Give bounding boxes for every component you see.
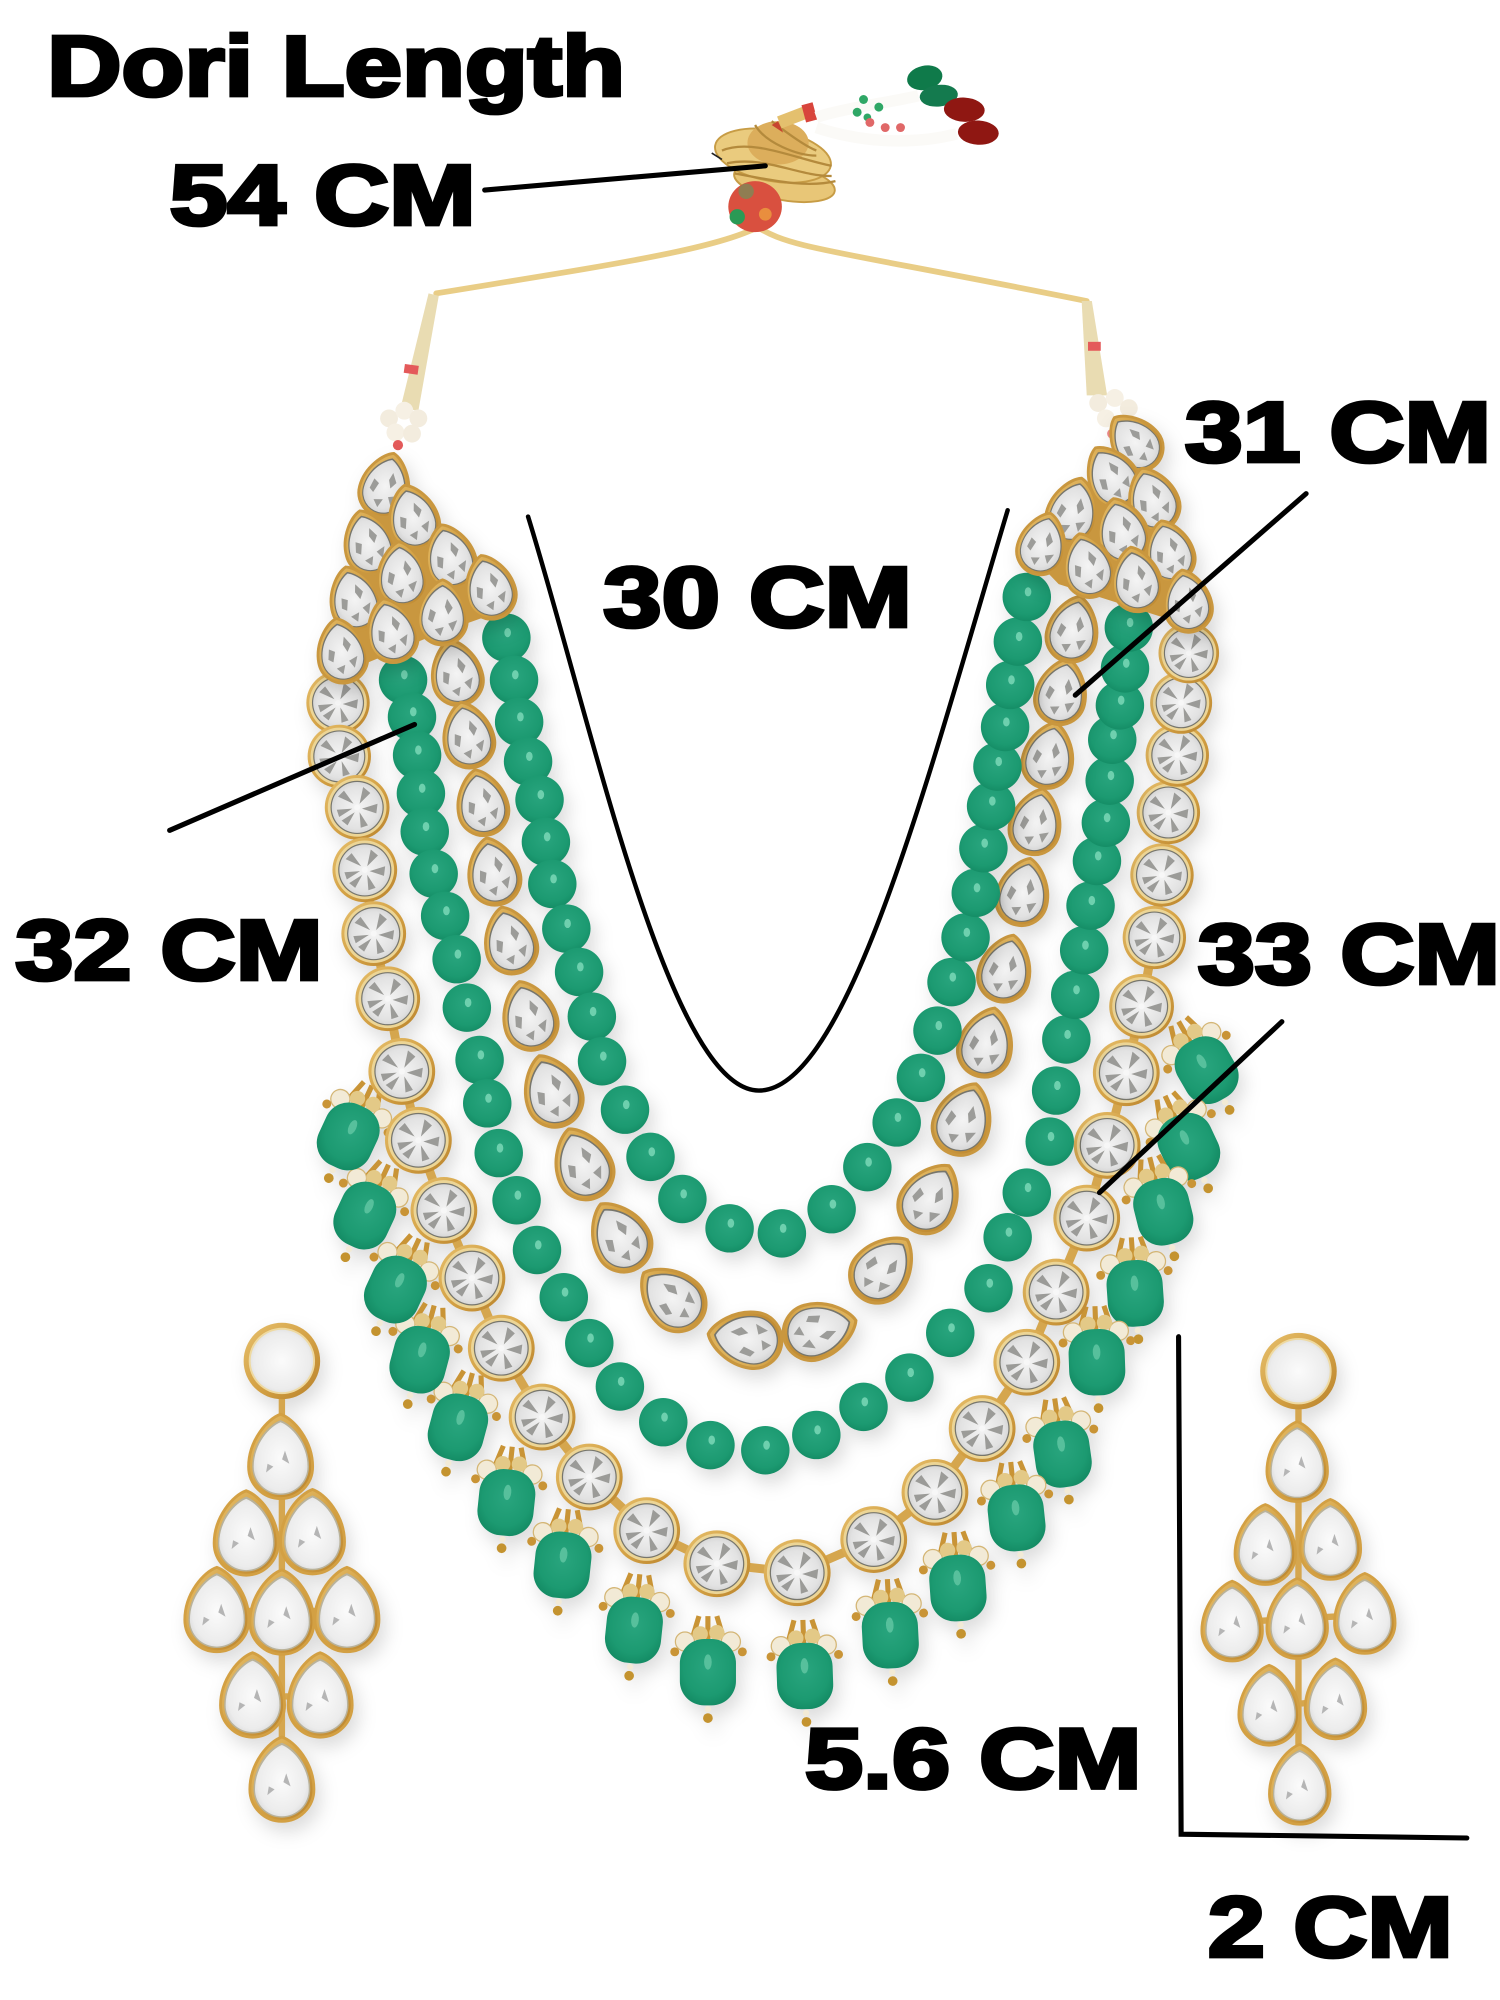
necklace cord bbox=[436, 227, 1087, 301]
arrow: 30 cm inner curve bbox=[528, 510, 1008, 1091]
label: 33 cm: 33 CM bbox=[1198, 907, 1500, 1002]
arrow: 33 cm pointer bbox=[1099, 1022, 1282, 1193]
left top stone cluster bbox=[312, 447, 522, 687]
right top stone cluster bbox=[1011, 402, 1216, 636]
left tassel end bbox=[380, 293, 439, 450]
clasp beads bbox=[816, 62, 999, 146]
label: 32 cm: 32 CM bbox=[15, 904, 323, 999]
middle kundan drop strand bbox=[425, 591, 1105, 1372]
label: 2 cm: 2 CM bbox=[1208, 1881, 1453, 1976]
arrow: 32 cm pointer bbox=[170, 724, 415, 830]
right tassel end bbox=[1082, 301, 1138, 439]
arrow: earring height bracket bbox=[1179, 1337, 1467, 1838]
label: 30 cm: 30 CM bbox=[603, 550, 912, 645]
title: dori length: Dori Length bbox=[47, 20, 625, 115]
outer green bead strand bbox=[379, 603, 1153, 1474]
label: 5.6 cm: 5.6 CM bbox=[805, 1712, 1142, 1807]
dori knot bbox=[711, 102, 838, 232]
label: 54 cm: 54 CM bbox=[170, 148, 476, 243]
arrow: dori length pointer bbox=[485, 166, 765, 190]
outer kundan strand with pendants bbox=[293, 623, 1266, 1728]
arrow: 31 cm pointer bbox=[1075, 494, 1306, 695]
left earring bbox=[185, 1323, 379, 1821]
label: 31 cm: 31 CM bbox=[1185, 386, 1491, 481]
hanging green pendants bbox=[293, 1002, 1266, 1728]
inner green bead strand bbox=[482, 573, 1051, 1258]
measurement lines bbox=[170, 166, 1467, 1838]
right earring bbox=[1202, 1333, 1395, 1824]
round kundan stones bbox=[306, 623, 1219, 1606]
